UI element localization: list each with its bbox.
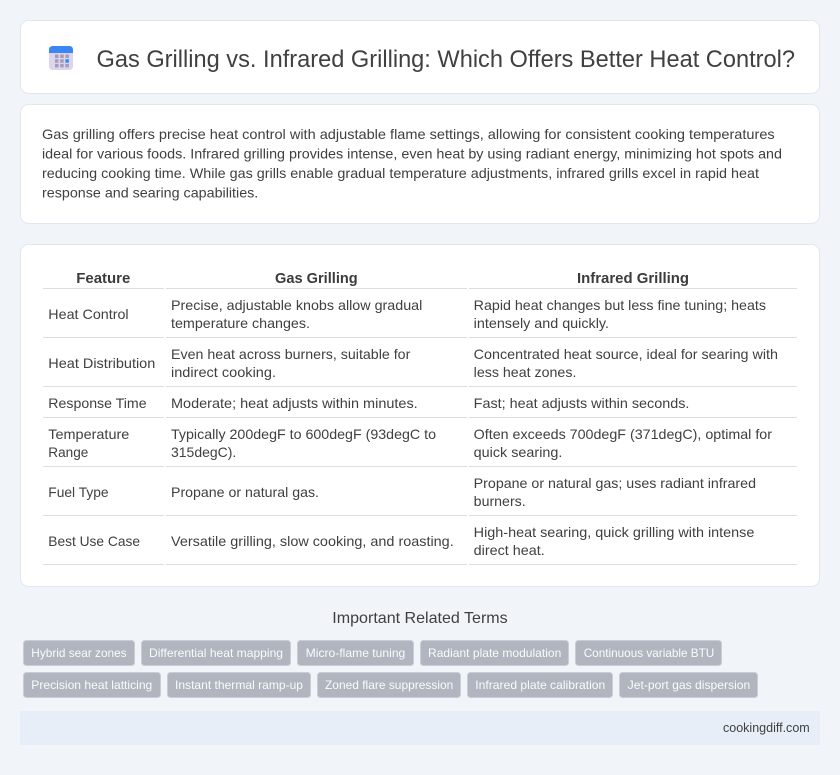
text block: description: reducing cooking time. While gas grills enable gradual temperature adjustments, infrared grills excel in rapid heat <box>42 165 759 181</box>
icon: calendar <box>49 46 73 70</box>
tag list: related terms: Zoned flare suppression <box>325 678 453 692</box>
row: temperature range: Temperature <box>48 426 130 442</box>
row: temperature range: Typically 200degF to 600degF (93degC to <box>171 426 436 442</box>
row: best use case <box>43 524 797 565</box>
row: response time: Response Time <box>48 395 147 411</box>
row: heat distribution: Concentrated heat source, ideal for searing with <box>474 346 778 362</box>
row: temperature range: Range <box>48 444 88 460</box>
tag list: related terms: Precision heat latticing <box>31 678 152 692</box>
table header <box>43 270 797 289</box>
row: heat control: intensely and quickly. <box>474 315 609 331</box>
title: Gas Grilling vs. Infrared Grilling: Which Offers Better Heat Control? <box>96 46 795 73</box>
row: heat distribution: less heat zones. <box>474 364 576 380</box>
row: best use case: Versatile grilling, slow cooking, and roasting. <box>171 533 454 549</box>
tag list: related terms <box>24 640 758 698</box>
row: heat distribution: Even heat across burners, suitable for <box>171 346 411 362</box>
table header: Infrared Grilling <box>577 270 689 287</box>
row: temperature range: Often exceeds 700degF (371degC), optimal for <box>474 426 772 442</box>
tag list: related terms: Infrared plate calibration <box>475 678 605 692</box>
row: heat control <box>43 297 797 338</box>
table header: Feature <box>76 270 130 287</box>
footer bar: cookingdiff.com <box>723 721 810 735</box>
panel: title card <box>20 20 820 94</box>
row: response time: Fast; heat adjusts within seconds. <box>474 395 689 411</box>
tag list: related terms: Hybrid sear zones <box>31 646 127 660</box>
tag list: related terms: Micro-flame tuning <box>306 646 405 660</box>
tag list: related terms: Instant thermal ramp-up <box>175 678 303 692</box>
tag list: related terms: Differential heat mapping <box>149 646 283 660</box>
row: temperature range <box>43 426 797 467</box>
row: fuel type <box>43 475 797 516</box>
text block: description <box>42 126 782 200</box>
row: heat distribution: indirect cooking. <box>171 364 276 380</box>
row: fuel type: Propane or natural gas; uses radiant infrared <box>474 475 756 491</box>
heading: important related terms: Important Related Terms <box>332 610 508 627</box>
tag list: related terms: Jet-port gas dispersion <box>628 678 750 692</box>
row: best use case: Best Use Case <box>48 533 140 549</box>
row: heat control: Heat Control <box>48 306 129 322</box>
row: best use case: High-heat searing, quick grilling with intense <box>474 524 755 540</box>
row: heat control: temperature changes. <box>171 315 310 331</box>
row: fuel type: Propane or natural gas. <box>171 484 319 500</box>
row: best use case: direct heat. <box>474 542 545 558</box>
row: heat control: Precise, adjustable knobs allow gradual <box>171 297 422 313</box>
panel: comparison table <box>20 244 820 586</box>
panel: description <box>20 104 820 224</box>
text block: description: Gas grilling offers precise heat control with adjustable flame settings, allowing for consistent cooking temperatures <box>42 126 775 142</box>
tag list: related terms: Continuous variable BTU <box>584 646 714 660</box>
tag list: related terms: Radiant plate modulation <box>428 646 561 660</box>
row: fuel type: burners. <box>474 493 526 509</box>
text block: description: response and searing capabilities. <box>42 184 258 200</box>
row: temperature range: 315degC). <box>171 444 236 460</box>
row: heat control: Rapid heat changes but less fine tuning; heats <box>474 297 766 313</box>
row: response time <box>43 395 797 418</box>
footer bar <box>20 711 820 745</box>
table header: Gas Grilling <box>275 270 358 287</box>
row: response time: Moderate; heat adjusts within minutes. <box>171 395 418 411</box>
row: heat distribution: Heat Distribution <box>48 355 155 371</box>
text block: description: ideal for various foods. Infrared grilling provides intense, even heat by using radiant energy, minimizing hot spots and <box>42 146 782 162</box>
row: temperature range: quick searing. <box>474 444 562 460</box>
row: heat distribution <box>43 346 797 387</box>
row: fuel type: Fuel Type <box>48 484 109 500</box>
